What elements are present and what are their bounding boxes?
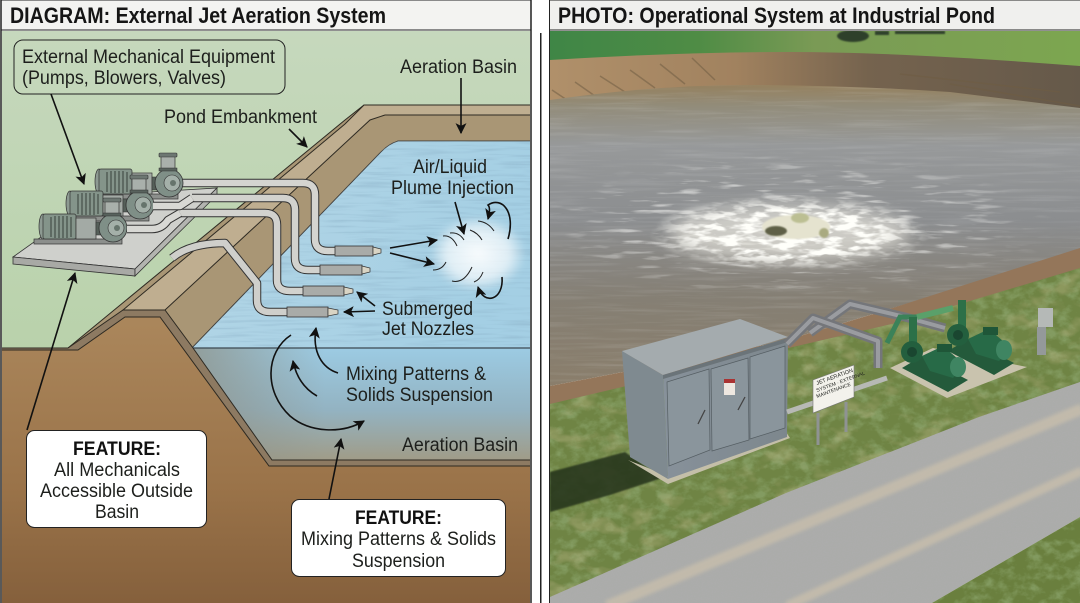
panel: diagram — [0, 0, 531, 603]
callout: feature accessible mechanicals: All Mechanicals — [54, 460, 180, 481]
embankment liner — [0, 310, 531, 466]
maintenance sign: MAINTENANCE — [816, 382, 853, 400]
middle pump — [61, 175, 154, 221]
green pump rear — [947, 324, 1014, 375]
arrows: nozzles — [344, 292, 375, 312]
maintenance sign: SYSTEM · EXTERNAL — [816, 371, 866, 394]
photo header bar — [550, 0, 1080, 30]
callout: feature mixing patterns: Mixing Patterns & Solids — [301, 529, 496, 550]
callout: feature accessible mechanicals: Basin — [95, 502, 139, 523]
label: mixing patterns: Mixing Patterns & — [346, 364, 486, 385]
label: submerged jet nozzles: Jet Nozzles — [382, 319, 474, 340]
label: external mechanical equipment — [14, 40, 285, 94]
distant trees — [837, 30, 945, 42]
foam field — [645, 192, 935, 274]
water ripples — [550, 85, 1080, 385]
label: mixing patterns: Solids Suspension — [346, 385, 493, 406]
label: plume injection: Air/Liquid — [413, 157, 487, 178]
plume turbulence marks — [433, 221, 494, 282]
panel: photo — [540, 0, 1080, 603]
label: aeration basin top: Aeration Basin — [400, 57, 517, 78]
label: aeration basin bottom: Aeration Basin — [402, 435, 518, 456]
pond embankment — [68, 105, 531, 348]
photo frame — [548, 0, 550, 603]
gravel road — [550, 382, 1080, 603]
label: submerged jet nozzles: Submerged — [382, 299, 473, 320]
pipe runs to nozzles — [172, 183, 381, 317]
pump platform — [13, 188, 217, 276]
grass texture — [550, 265, 1080, 603]
air and liquid plume — [430, 216, 526, 292]
grass — [550, 268, 1080, 600]
gravel texture — [550, 375, 1080, 603]
middle discharge pipe — [153, 198, 192, 206]
equipment cabinet — [622, 319, 788, 479]
diagram header bar — [1, 0, 531, 30]
photo scene — [540, 30, 1080, 603]
aeration boil — [762, 213, 830, 239]
label: mixing patterns — [346, 364, 493, 406]
front pump — [34, 198, 127, 244]
concrete pad — [628, 432, 790, 484]
bank furrows — [552, 58, 1080, 106]
grey discharge pipes — [787, 304, 945, 368]
arrow: feature one leader — [27, 273, 75, 430]
far field — [550, 30, 1080, 70]
callout: feature mixing patterns: Suspension — [352, 551, 445, 572]
rear pump — [90, 153, 183, 199]
arrow: pond embankment — [289, 129, 307, 147]
green pump front — [901, 341, 968, 392]
pond water — [550, 85, 1080, 386]
sign posts — [818, 402, 846, 445]
pipe 2 and nozzle — [192, 198, 370, 275]
label: plume injection: Plume Injection — [391, 178, 514, 199]
green risers and header — [887, 300, 962, 343]
callout: feature mixing patterns: FEATURE: — [355, 508, 442, 529]
water ripples — [192, 141, 531, 348]
label: submerged jet nozzles — [382, 301, 474, 335]
roadside grass — [932, 517, 1080, 603]
near bank soil — [550, 248, 1080, 412]
far bank — [550, 52, 1080, 120]
dry grass patches — [550, 265, 1080, 603]
label: pond embankment: Pond Embankment — [164, 107, 318, 128]
label: external mechanical equipment: External Mechanical Equipment — [22, 47, 276, 68]
ground pipe — [787, 378, 887, 412]
callout: feature accessible mechanicals: FEATURE: — [73, 439, 161, 460]
pump sets — [34, 153, 192, 244]
centre divider line — [540, 33, 542, 603]
electrical box on post — [1037, 308, 1053, 355]
arrows: mixing flow — [271, 328, 364, 430]
diagram scene — [0, 30, 531, 603]
callout: feature accessible mechanicals: Accessible Outside — [40, 481, 193, 502]
foam wisps — [540, 150, 1080, 300]
soil cross-section — [0, 314, 531, 603]
road wheel tracks — [607, 409, 1080, 603]
lower basin water — [193, 348, 531, 460]
diagram frame — [1, 0, 531, 603]
front discharge pipe — [127, 213, 180, 229]
cabinet shadow — [550, 452, 662, 512]
arrows: jet flow and plume — [390, 202, 510, 298]
pipe 3 and nozzle — [180, 213, 353, 296]
pipe 4 and nozzle — [172, 243, 338, 317]
roadside grass texture — [930, 515, 1080, 603]
upper basin water — [192, 141, 531, 348]
maintenance sign — [813, 365, 866, 413]
pipe 1 and nozzle — [182, 183, 381, 256]
photo heading: PHOTO: Operational System at Industrial Pond — [558, 3, 995, 28]
callout: feature mixing patterns — [292, 500, 506, 576]
arrow: equipment — [51, 94, 84, 184]
label: plume injection — [391, 157, 514, 199]
concrete pump pad — [890, 348, 1027, 398]
ground surface — [0, 30, 531, 350]
arrow: feature two leader — [329, 439, 341, 499]
arrow: aeration basin — [460, 78, 462, 133]
maintenance sign: JET AERATION — [816, 368, 854, 387]
callout: feature accessible mechanicals — [26, 430, 206, 528]
diagram heading: DIAGRAM: External Jet Aeration System — [10, 3, 386, 28]
label: external mechanical equipment: (Pumps, Blowers, Valves) — [22, 68, 226, 89]
